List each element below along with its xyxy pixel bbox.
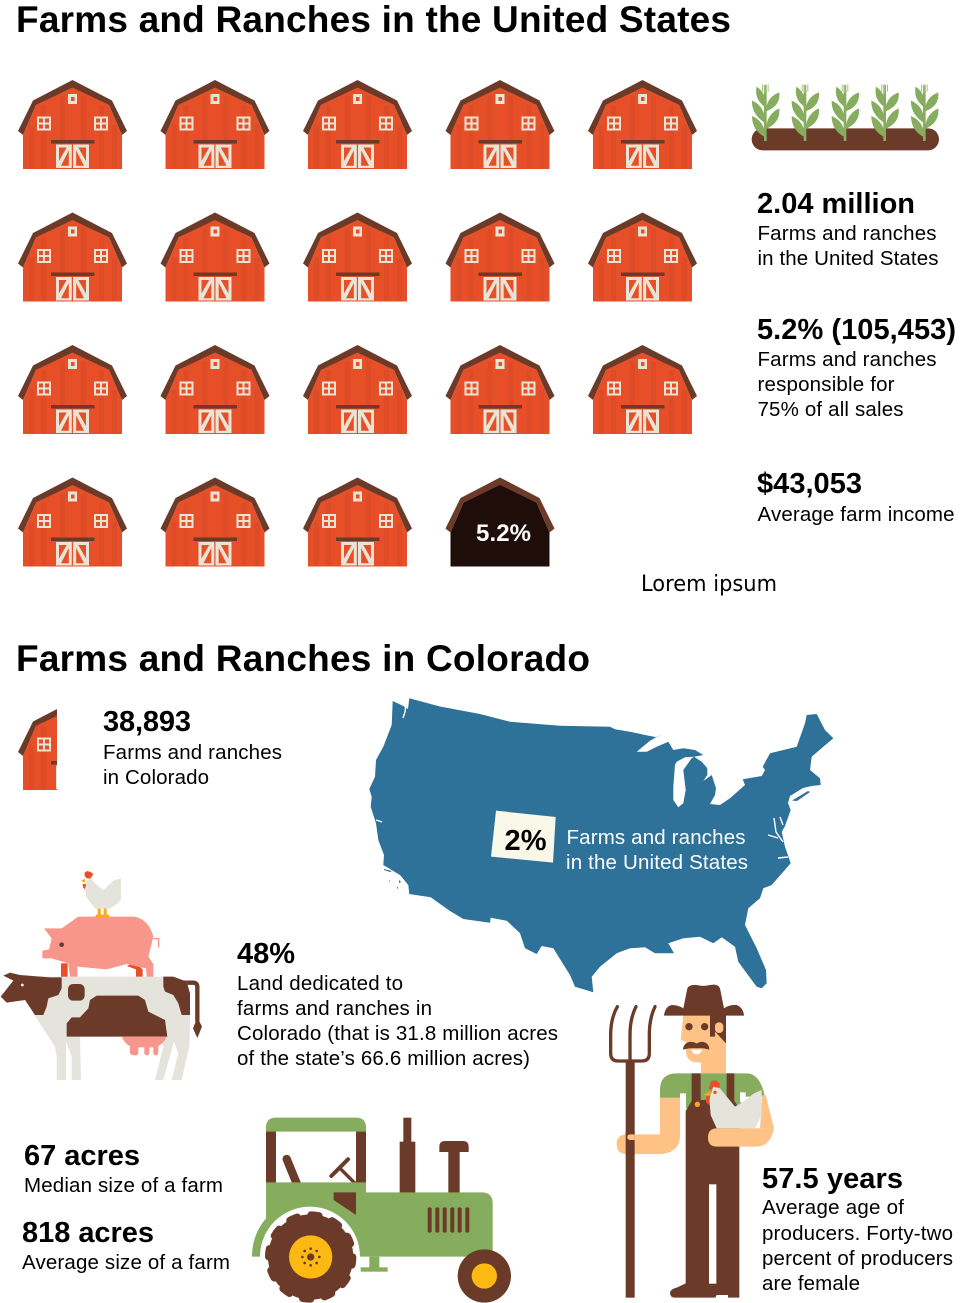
stat: 48%: farms and ranches in	[237, 997, 432, 1020]
icon: barn row 2	[18, 212, 697, 302]
stat: 57.5 years: percent of producers	[762, 1247, 953, 1270]
map caption: in the United States	[566, 851, 748, 874]
stat: 48%: 48%	[237, 938, 295, 970]
long island	[792, 791, 810, 801]
stat: 818 acres: Average size of a farm	[22, 1251, 230, 1274]
chicken in arm	[703, 1080, 762, 1128]
2% value: 2%	[504, 825, 547, 857]
stat: 48%: Land dedicated to	[237, 972, 403, 995]
stat: 38,893: 38,893	[103, 706, 191, 738]
stat: 38,893: Farms and ranches	[103, 741, 282, 764]
icon: farmer with pitchfork and chicken	[611, 985, 774, 1298]
stat: $43,053	[757, 468, 954, 526]
stat: 67 acres: 67 acres	[24, 1140, 140, 1172]
icon: barn row 4	[18, 478, 412, 566]
stat: 57.5 years: 57.5 years	[762, 1163, 903, 1195]
overalls	[670, 1073, 739, 1298]
map caption: Farms and ranches	[566, 826, 746, 849]
stat: 5.2% (105,453): 75% of all sales	[758, 398, 904, 421]
stat: 2.04 million	[757, 188, 938, 270]
stat: 2.04 million: Farms and ranches	[758, 222, 936, 245]
icon: crop row	[752, 84, 939, 150]
stat: 57.5 years: Average age of	[762, 1196, 904, 1219]
stat: 48%: Colorado (that is 31.8 million acres	[237, 1022, 558, 1045]
stat: 48%: of the state’s 66.6 million acres)	[237, 1047, 530, 1070]
stat: 2.04 million: in the United States	[758, 247, 938, 270]
stat: 48%	[237, 938, 558, 1070]
icon: cow, pig and chicken stack	[1, 871, 202, 1080]
stat: 38,893	[103, 706, 282, 789]
arms and shirt	[617, 1073, 774, 1155]
title: Farms and Ranches in the United States	[16, 0, 731, 40]
map: United States	[369, 698, 833, 992]
stat: 5.2% (105,453): 5.2% (105,453)	[757, 314, 956, 346]
cow	[1, 973, 202, 1080]
icon: dark barn 5.2%	[446, 478, 554, 566]
chicken	[81, 871, 121, 917]
california islands	[384, 869, 401, 889]
stat: $43,053: Average farm income	[758, 503, 954, 526]
panel: barn pictogram	[18, 80, 697, 566]
stat: 818 acres	[22, 1217, 230, 1274]
forearm	[708, 1128, 774, 1147]
stat: 57.5 years: producers. Forty-two	[762, 1222, 953, 1245]
pitchfork	[611, 1007, 655, 1298]
stat: $43,053: $43,053	[757, 468, 862, 500]
stat: 57.5 years: are female	[762, 1272, 860, 1295]
stat: 5.2% (105,453): responsible for	[758, 373, 895, 396]
placeholder text: Lorem ipsum	[641, 572, 777, 597]
colorado highlight	[491, 811, 556, 863]
stat: 5.2% (105,453): Farms and ranches	[758, 348, 936, 371]
face and hat	[664, 985, 744, 1073]
icon: barn row 1	[18, 80, 697, 169]
icon: tractor	[252, 1118, 511, 1303]
icon: barn row 3	[18, 345, 697, 434]
stat: 67 acres	[24, 1140, 223, 1197]
heading: Colorado: Farms and Ranches in Colorado	[16, 638, 590, 679]
stat: 38,893: in Colorado	[103, 766, 209, 789]
icon: cropped barn	[18, 709, 57, 790]
icon: dark barn 5.2%: 5.2%	[476, 520, 531, 547]
stat: 2.04 million: 2.04 million	[757, 188, 915, 220]
stat: 5.2% (105,453)	[757, 314, 956, 421]
pig	[42, 917, 159, 977]
stat: 818 acres: 818 acres	[22, 1217, 154, 1249]
coastal inlets	[376, 703, 788, 858]
stat: 67 acres: Median size of a farm	[24, 1174, 223, 1197]
stat: 57.5 years	[762, 1163, 953, 1295]
map caption	[566, 826, 748, 874]
